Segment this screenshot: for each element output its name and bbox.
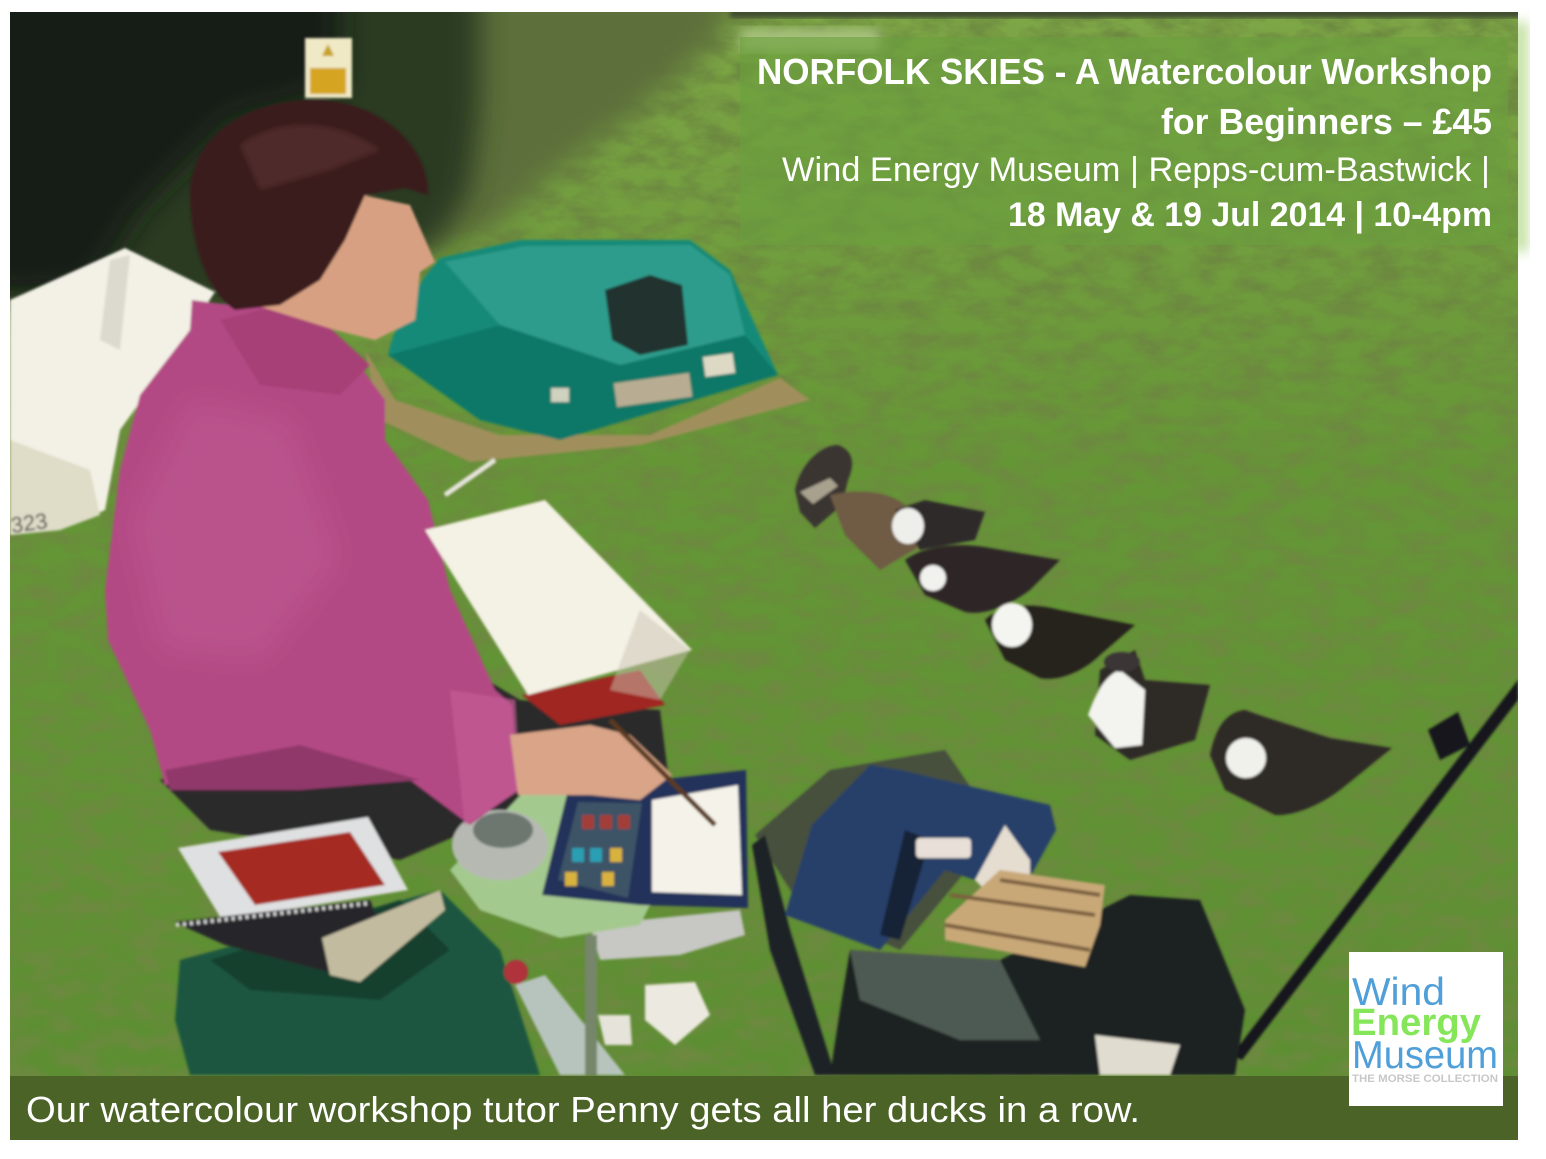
Wind Energy Museum logo: Wind bbox=[1352, 971, 1445, 1014]
heading line 2: for Beginners – £45 bbox=[1161, 101, 1492, 142]
pencil in hand bbox=[445, 460, 495, 495]
water bottle and paper tissues bbox=[504, 935, 710, 1075]
teal upturned boat bbox=[388, 240, 778, 440]
heading line 1: NORFOLK SKIES - A Watercolour Workshop bbox=[757, 51, 1492, 92]
duck 6 bbox=[1210, 710, 1392, 815]
duck 3 bbox=[905, 545, 1060, 613]
white upturned boat bbox=[9, 248, 215, 538]
hedge and trees at top bbox=[0, 0, 1530, 320]
pink jumper bbox=[105, 300, 518, 825]
white upturned boat: 323 bbox=[9, 508, 49, 538]
watercolour palette box bbox=[542, 770, 748, 908]
caption text: Our watercolour workshop tutor Penny gets all her ducks in a row. bbox=[26, 1089, 1140, 1130]
water jar bbox=[452, 810, 548, 880]
navy brush roll bbox=[785, 765, 1056, 950]
dark hair bbox=[190, 100, 428, 310]
event details panel bbox=[740, 37, 1508, 245]
tutor Penny bbox=[105, 100, 672, 825]
green stool table bbox=[450, 785, 650, 938]
woman's lower body bbox=[160, 640, 670, 860]
duck 5 bbox=[1088, 650, 1210, 760]
warning sign on post bbox=[305, 38, 352, 98]
tripod leg bbox=[1232, 680, 1518, 1060]
ducks in a row bbox=[795, 445, 1392, 815]
Wind Energy Museum logo: Energy bbox=[1351, 1002, 1481, 1044]
books and sketchpad bbox=[174, 817, 445, 982]
Wind Energy Museum logo bbox=[1349, 952, 1503, 1106]
Wind Energy Museum logo: THE MORSE COLLECTION bbox=[1352, 1073, 1498, 1085]
duck 4 bbox=[985, 603, 1135, 679]
straw patch under green boat bbox=[365, 350, 810, 462]
venue line: Wind Energy Museum | Repps-cum-Bastwick | bbox=[782, 151, 1490, 189]
caption bar bbox=[10, 1076, 1518, 1140]
duck 2 bbox=[892, 500, 985, 550]
paintbrush bbox=[610, 720, 715, 825]
date and time line: 18 May & 19 Jul 2014 | 10-4pm bbox=[1008, 196, 1492, 234]
green bag at her feet bbox=[175, 890, 540, 1075]
wooden clothes pegs bundle bbox=[945, 870, 1105, 967]
red booklet bbox=[522, 670, 665, 725]
hand and forearm bbox=[510, 725, 672, 800]
Wind Energy Museum logo: Museum bbox=[1352, 1034, 1498, 1077]
green glow at the photo's right edge bbox=[1512, 22, 1528, 252]
camping chair, bag and equipment bbox=[752, 750, 1245, 1075]
face and neck bbox=[255, 190, 435, 340]
white shoe bbox=[590, 910, 745, 960]
white painting paper bbox=[425, 500, 692, 700]
duck 1 bbox=[795, 445, 930, 570]
